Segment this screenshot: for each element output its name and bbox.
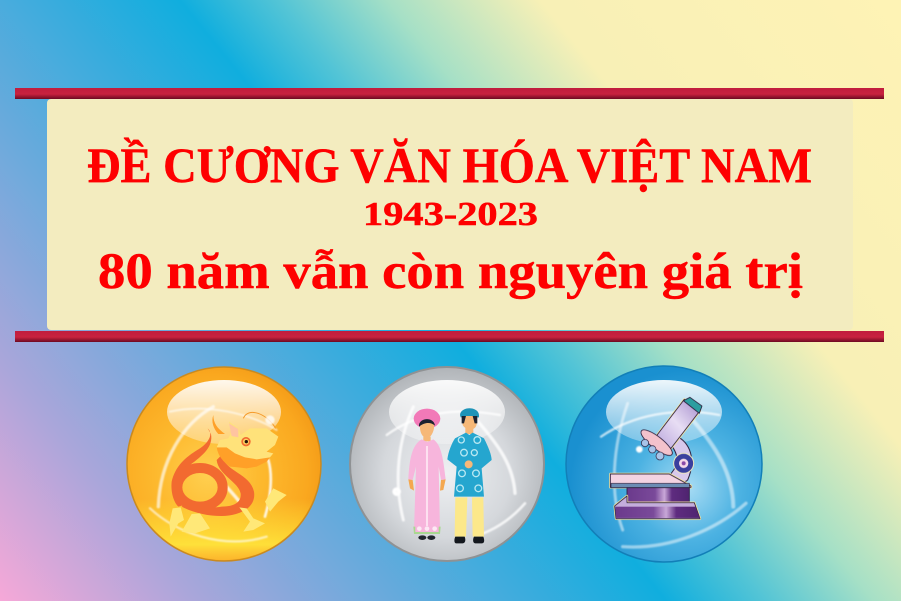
icon: orange orb with dragon [127,367,321,561]
top red bar [15,88,884,99]
icon: silver orb with couple [350,367,544,561]
dragon [169,412,287,537]
title panel [47,99,853,330]
woman in pink ao dai [408,409,446,540]
years: 1943-2023 [363,196,538,233]
bottom red bar [15,331,884,342]
microscope [610,397,702,519]
title: ĐỀ CƯƠNG VĂN HÓA VIỆT NAM [87,136,812,193]
subtitle: 80 năm vẫn còn nguyên giá trị [98,244,803,300]
icon: blue orb with microscope [566,366,762,562]
man in blue ao dai [447,408,492,543]
